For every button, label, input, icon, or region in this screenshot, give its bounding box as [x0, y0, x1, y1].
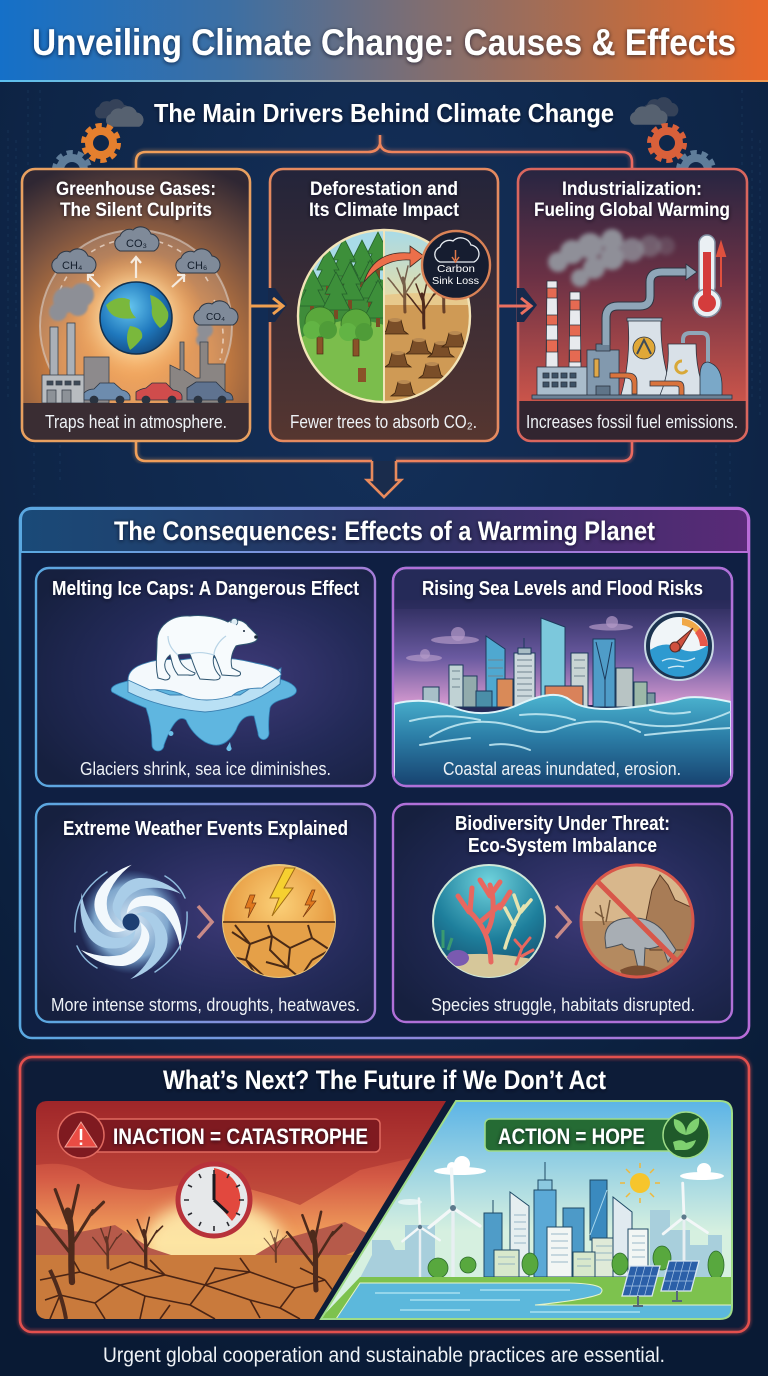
illustration: flood water: [394, 695, 731, 786]
panel: consequences: [20, 508, 749, 1038]
consequences header band: [21, 509, 748, 552]
panel: action scene: [320, 1101, 736, 1319]
icon: drought and lightning: [223, 865, 335, 978]
panel: inaction scene: [36, 1101, 446, 1319]
illustration: clock: [178, 1164, 250, 1236]
illustration: gas clouds: CH₄: [62, 260, 83, 272]
panel: deforestation: [270, 169, 498, 441]
illustration: gas clouds: [52, 227, 238, 325]
illustration: smoke: [49, 283, 213, 346]
connector: drivers bottom bracket: [136, 440, 632, 461]
illustration: cracked earth: [36, 1255, 353, 1319]
illustration: sun and clouds: [398, 1156, 724, 1205]
panel: industrialization: [518, 169, 747, 441]
card caption: Coastal areas inundated, erosion.: [443, 758, 681, 779]
arrow: chevron: [556, 906, 570, 938]
connector: drivers top bracket: [136, 135, 632, 170]
card caption: Species struggle, habitats disrupted.: [431, 994, 695, 1015]
footer statement: Urgent global cooperation and sustainable practices are essential.: [103, 1344, 665, 1367]
drivers heading: The Main Drivers Behind Climate Change: [154, 98, 614, 128]
illustration: distant skyline: [360, 1210, 722, 1278]
card caption: Glaciers shrink, sea ice diminishes.: [80, 758, 331, 779]
card title: Greenhouse Gases:: [56, 179, 216, 200]
future heading: What’s Next? The Future if We Don’t Act: [163, 1065, 606, 1095]
left gears and smoke: [55, 99, 144, 187]
illustration: earth: [100, 282, 172, 354]
card title: Biodiversity Under Threat:: [455, 813, 670, 835]
card title: Industrialization:: [562, 179, 702, 200]
illustration: solar panels: [622, 1261, 699, 1306]
card caption: More intense storms, droughts, heatwaves.: [51, 994, 360, 1015]
illustration: factories: [42, 323, 225, 403]
illustration: cars: [84, 382, 233, 404]
illustration: deforested half: [382, 230, 470, 402]
card caption: Increases fossil fuel emissions.: [526, 412, 738, 432]
card title: Extreme Weather Events Explained: [63, 818, 348, 840]
illustration: melting ice with polar bear: [111, 615, 296, 751]
illustration: cooling towers: [532, 318, 732, 399]
badge: carbon sink loss: Sink Loss: [432, 275, 479, 287]
badge: inaction: [58, 1112, 380, 1158]
icon: threatened habitat: [581, 865, 693, 980]
illustration: greenhouse dome: [40, 230, 232, 422]
illustration: trees: [428, 1246, 724, 1279]
illustration: smoke plumes: [548, 229, 675, 287]
card title: Rising Sea Levels and Flood Risks: [422, 578, 703, 600]
badge: carbon sink loss: Carbon: [437, 263, 475, 275]
illustration: thermometer: [693, 235, 725, 317]
illustration: pipe: [606, 272, 688, 345]
illustration: clouds and hills: [36, 1101, 446, 1255]
card title: Deforestation and: [310, 179, 458, 200]
arrow: gases to deforestation: [250, 288, 287, 322]
card title: [309, 179, 460, 221]
card caption: Traps heat in atmosphere.: [45, 412, 227, 432]
illustration: sea level gauge: [645, 612, 713, 680]
illustration: wind turbines: [402, 1169, 707, 1278]
card title: Its Climate Impact: [309, 200, 460, 221]
badge: inaction: INACTION = CATASTROPHE: [113, 1124, 368, 1149]
illustration: factory building: [537, 344, 619, 398]
badge: carbon sink loss: [422, 231, 490, 299]
card: extreme weather: [36, 804, 375, 1022]
panel: future: [20, 1057, 749, 1367]
panel: greenhouse gases: [22, 169, 250, 441]
illustration: dead trees: [36, 1185, 342, 1319]
card title: The Silent Culprits: [60, 200, 212, 221]
decorative data streams: [8, 90, 760, 500]
card title: [56, 179, 216, 221]
card: biodiversity: [393, 804, 732, 1022]
illustration: gas clouds: CO₃: [126, 238, 147, 250]
icon: hurricane: [68, 857, 194, 987]
badge: action: [485, 1112, 709, 1158]
icon: coral reef: [433, 865, 545, 978]
illustration: chimneys: [546, 281, 581, 368]
header banner: [0, 0, 768, 82]
card: melting ice caps: [36, 568, 375, 786]
card: rising sea levels: [393, 568, 732, 786]
card title: Melting Ice Caps: A Dangerous Effect: [52, 578, 359, 600]
card caption: Fewer trees to absorb CO₂.: [290, 412, 477, 432]
illustration: skyline: [423, 618, 655, 707]
right gears and smoke: [630, 97, 713, 187]
arrow: chevron: [198, 906, 212, 938]
card title: [534, 179, 730, 221]
illustration: gas clouds: CH₆: [187, 260, 207, 272]
arrow: forest to loss: [364, 246, 424, 282]
illustration: sky: [394, 600, 731, 705]
arrow: deforestation to industrialization: [498, 288, 537, 322]
card title: Fueling Global Warming: [534, 200, 730, 221]
badge: action: ACTION = HOPE: [498, 1124, 645, 1149]
arrow: causes to consequences: [367, 461, 401, 497]
illustration: forest half: [299, 231, 383, 401]
card title: [455, 813, 670, 857]
card title: Eco-System Imbalance: [468, 835, 657, 857]
illustration: gas clouds: CO₄: [206, 312, 225, 323]
consequences heading: The Consequences: Effects of a Warming Planet: [114, 516, 655, 546]
illustration: city towers: [484, 1162, 648, 1277]
illustration: lake and land: [320, 1277, 736, 1319]
